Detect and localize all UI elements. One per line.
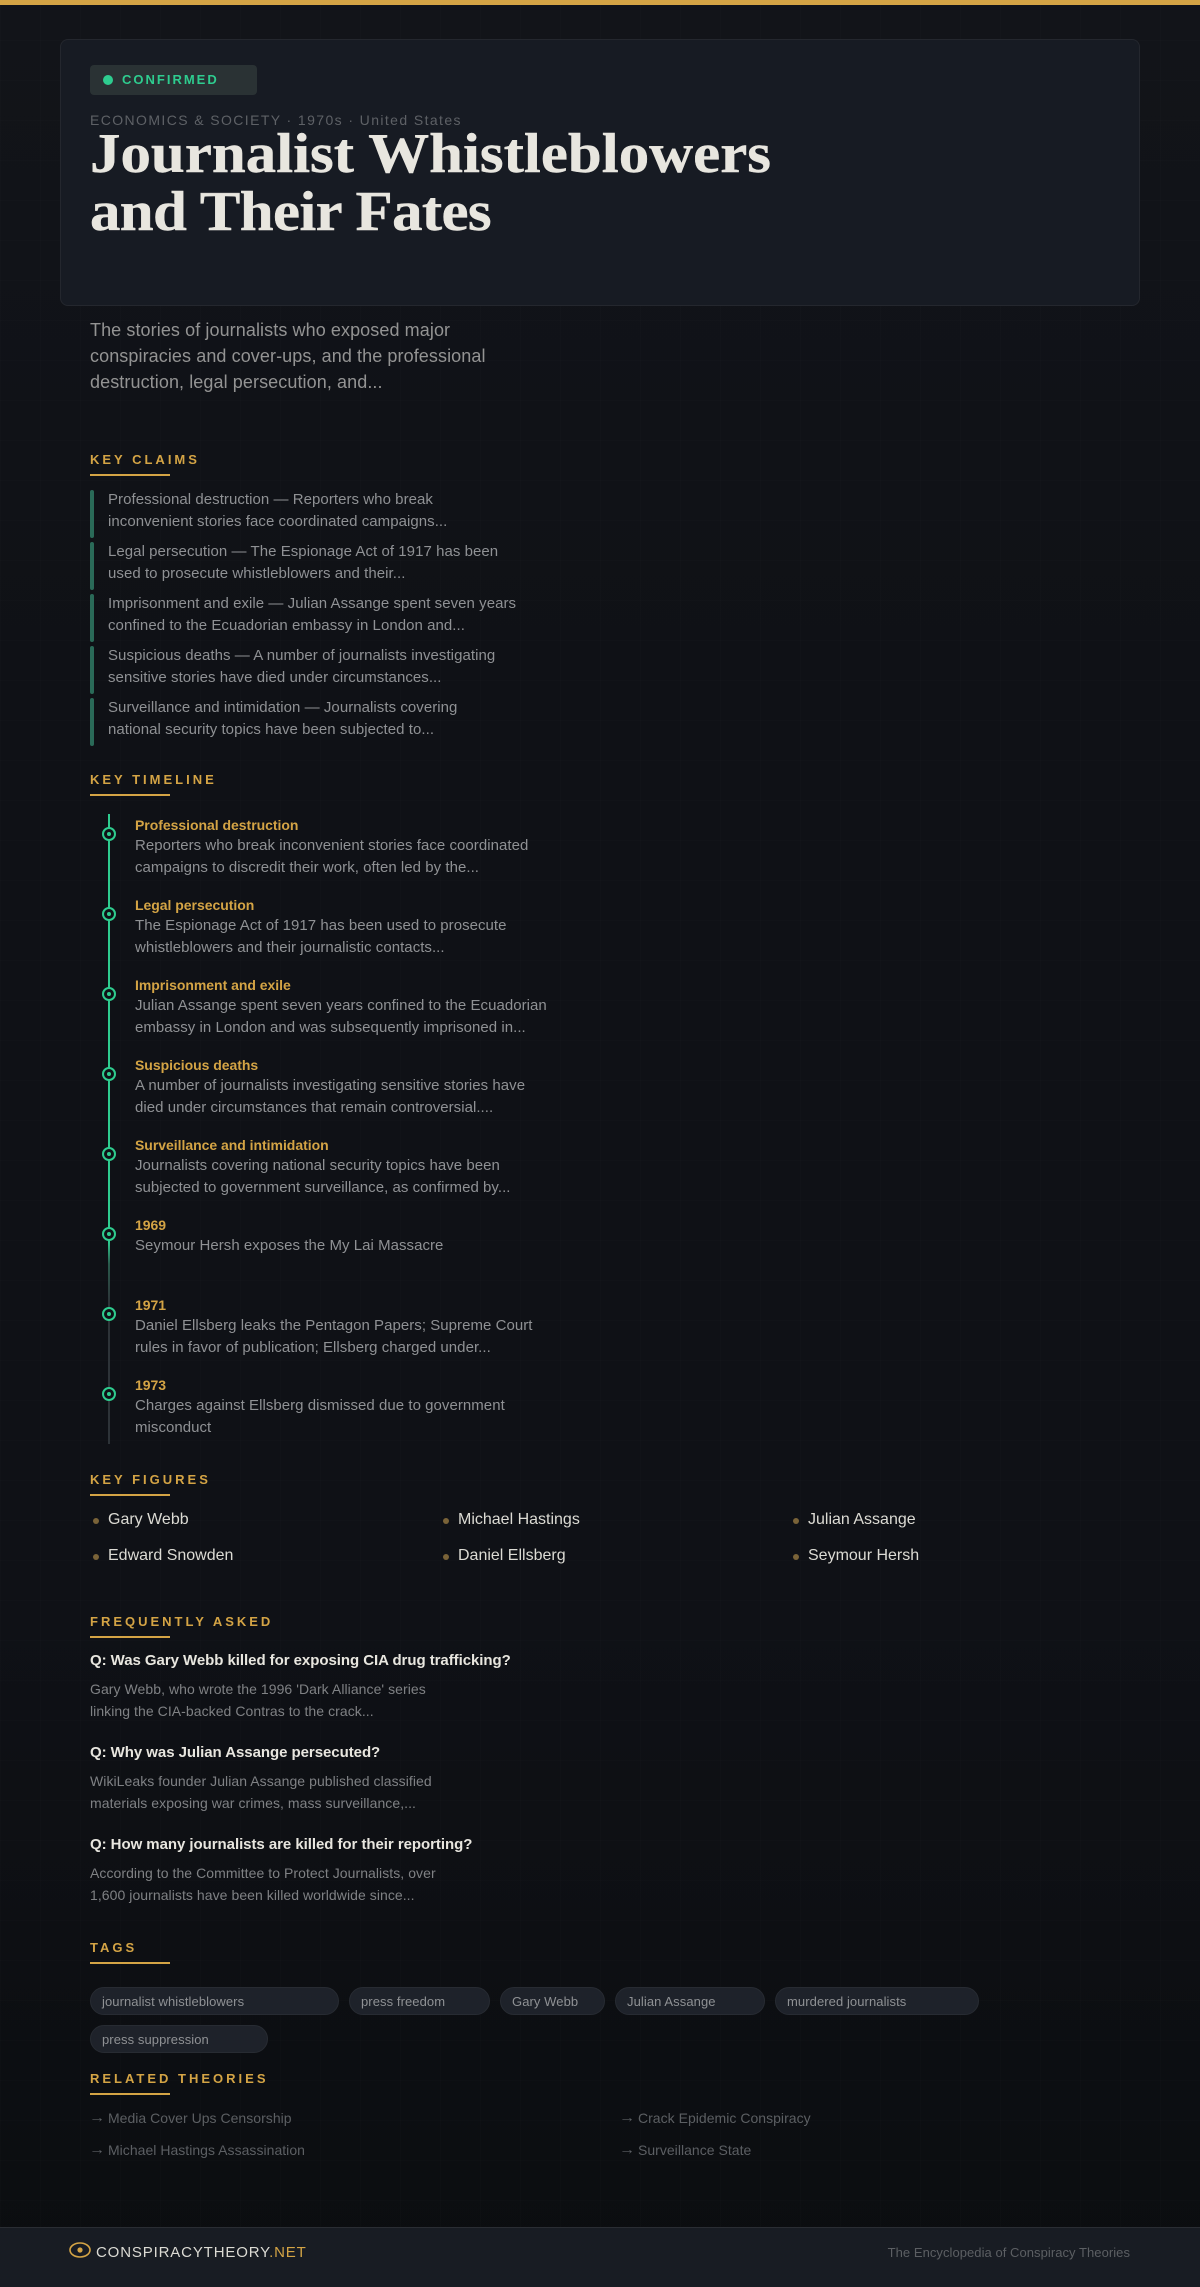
icon: eye logo [69,2242,91,2258]
hero panel [60,39,1140,306]
related link: Media Cover Ups Censorship [108,2110,292,2126]
figure: Seymour Hersh: Seymour Hersh [808,1547,919,1564]
faq 1: Gary Webb, who wrote the 1996 'Dark Alliance' series [90,1681,426,1697]
badge label: CONFIRMED [122,72,219,87]
related link: → [89,2109,105,2125]
event: 1971: Daniel Ellsberg leaks the Pentagon Papers; Supreme Court [135,1317,532,1334]
tag [500,1987,605,2015]
heading: frequently asked: FREQUENTLY ASKED [90,1614,273,1629]
related link: → [619,2109,635,2125]
faq 2: WikiLeaks founder Julian Assange published classified [90,1773,432,1789]
tag list [90,1987,979,2053]
claim 5 [90,698,457,746]
faq 2: Q: Why was Julian Assange persecuted? [90,1744,380,1761]
event: legal persecution: Legal persecution [135,897,254,913]
event: imprisonment and exile: Julian Assange spent seven years confined to the Ecuadorian [135,997,547,1014]
tag: press suppression [102,2032,209,2047]
claim 2: Legal persecution — The Espionage Act of 1917 has been [108,543,498,560]
event: 1969: Seymour Hersh exposes the My Lai Massacre [135,1237,443,1254]
top accent bar [0,0,1200,5]
faq 1: linking the CIA-backed Contras to the crack... [90,1703,374,1719]
claim 1 [90,490,447,538]
claim 4: Suspicious deaths — A number of journalists investigating [108,647,495,664]
event: imprisonment and exile: embassy in London and was subsequently imprisoned in... [135,1019,526,1036]
faq 3: Q: How many journalists are killed for their reporting? [90,1836,472,1853]
intro text: destruction, legal persecution, and... [90,372,383,392]
faq 3 [90,1836,472,1903]
event: surveillance and intimidation: Surveillance and intimidation [135,1137,329,1153]
figure: Edward Snowden: Edward Snowden [108,1547,233,1564]
figure: Gary Webb: Gary Webb [108,1511,189,1528]
event: 1971: 1971 [135,1297,166,1313]
related link: → [89,2141,105,2157]
claim 1: inconvenient stories face coordinated campaigns... [108,513,447,530]
tag: press freedom [361,1994,445,2009]
figure: Julian Assange: Julian Assange [808,1511,916,1528]
tag [615,1987,765,2015]
claim 2 [90,542,498,590]
tag: journalist whistleblowers [102,1994,244,2009]
event: surveillance and intimidation [102,1137,510,1196]
claim 4: sensitive stories have died under circumstances... [108,669,442,686]
event: legal persecution [102,897,507,956]
tag: murdered journalists [787,1994,906,2009]
tag [90,1987,339,2015]
timeline [102,814,547,1444]
related theories list [89,2109,811,2158]
timeline spine [108,814,110,1444]
heading: key figures: KEY FIGURES [90,1472,211,1487]
event: 1973 [102,1377,505,1436]
title: Journalist Whistleblowers [90,123,771,185]
faq 3: According to the Committee to Protect Journalists, over [90,1865,436,1881]
related link: Surveillance State [638,2142,751,2158]
intro text: The stories of journalists who exposed major [90,320,450,340]
event: legal persecution: whistleblowers and their journalistic contacts... [135,939,445,956]
figure: Daniel Ellsberg: Daniel Ellsberg [458,1547,566,1564]
event: 1971 [102,1297,532,1356]
intro text [90,320,486,392]
heading: key claims: KEY CLAIMS [90,452,200,467]
heading: key timeline: KEY TIMELINE [90,772,217,787]
footer tagline: The Encyclopedia of Conspiracy Theories [888,2245,1130,2260]
status badge: confirmed [90,65,257,95]
title: and Their Fates [90,181,491,243]
related link: → [619,2141,635,2157]
heading: related theories: RELATED THEORIES [90,2071,268,2086]
faq 1: Q: Was Gary Webb killed for exposing CIA drug trafficking? [90,1652,511,1669]
event: professional destruction: Reporters who break inconvenient stories face coordinated [135,837,528,854]
event: suspicious deaths: died under circumstances that remain controversial.... [135,1099,493,1116]
event: suspicious deaths: A number of journalists investigating sensitive stories have [135,1077,525,1094]
event: suspicious deaths: Suspicious deaths [135,1057,258,1073]
event: 1969 [102,1217,443,1254]
icon: status dot [103,75,113,85]
event: professional destruction: campaigns to discredit their work, often led by the... [135,859,479,876]
tag: Gary Webb [512,1994,578,2009]
faq 2: materials exposing war crimes, mass surveillance,... [90,1795,416,1811]
event: legal persecution: The Espionage Act of 1917 has been used to prosecute [135,917,507,934]
faq 2 [90,1744,432,1811]
title [90,123,771,243]
event: surveillance and intimidation: subjected to government surveillance, as confirmed by... [135,1179,510,1196]
event: professional destruction [102,817,528,876]
claim 3 [90,594,516,642]
claim 3: Imprisonment and exile — Julian Assange spent seven years [108,595,516,612]
footer [0,2227,1200,2287]
claim 4 [90,646,495,694]
event: 1973: 1973 [135,1377,166,1393]
heading: tags: TAGS [90,1940,137,1955]
event: imprisonment and exile: Imprisonment and exile [135,977,291,993]
key claims list [90,490,516,746]
intro text: conspiracies and cover-ups, and the professional [90,346,486,366]
category meta line: ECONOMICS & SOCIETY · 1970s · United States [90,112,462,128]
related link: Michael Hastings Assassination [108,2142,305,2158]
event: professional destruction: Professional destruction [135,817,298,833]
event: surveillance and intimidation: Journalists covering national security topics have been [135,1157,500,1174]
event: 1973: misconduct [135,1419,211,1436]
event: imprisonment and exile [102,977,547,1036]
claim 5: national security topics have been subjected to... [108,721,434,738]
event: 1973: Charges against Ellsberg dismissed due to government [135,1397,505,1414]
key figures list [93,1511,919,1564]
claim 3: confined to the Ecuadorian embassy in London and... [108,617,465,634]
faq 1 [90,1652,511,1719]
event: 1971: rules in favor of publication; Ellsberg charged under... [135,1339,491,1356]
related link: Crack Epidemic Conspiracy [638,2110,811,2126]
event: suspicious deaths [102,1057,525,1116]
claim 1: Professional destruction — Reporters who break [108,491,433,508]
tag [90,2025,268,2053]
claim 2: used to prosecute whistleblowers and their... [108,565,405,582]
event: 1969: 1969 [135,1217,166,1233]
tag [349,1987,490,2015]
tag [775,1987,979,2015]
figure: Michael Hastings: Michael Hastings [458,1511,580,1528]
faq 3: 1,600 journalists have been killed worldwide since... [90,1887,415,1903]
tag: Julian Assange [627,1994,716,2009]
logo wordmark: CONSPIRACYTHEORY.NET [96,2244,307,2261]
claim 5: Surveillance and intimidation — Journalists covering [108,699,457,716]
